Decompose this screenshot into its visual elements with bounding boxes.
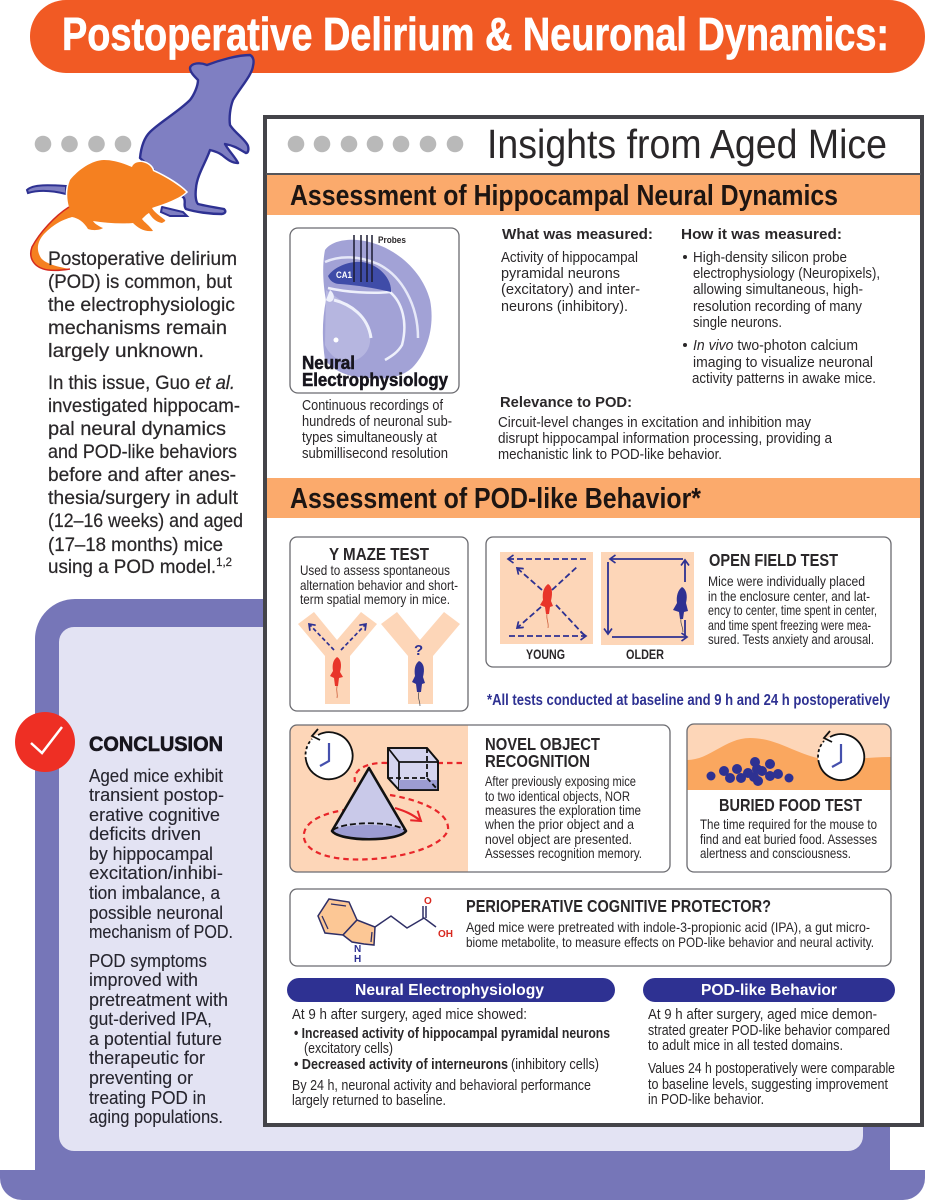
icon: orange mouse [31, 160, 186, 270]
conclusion text: pretreatment with [89, 989, 228, 1010]
card: novel object recognition [290, 725, 670, 872]
conclusion text: mechanism of POD. [89, 921, 233, 942]
title banner [30, 0, 925, 73]
card: neural electrophysiology: CA1 [336, 270, 352, 280]
card: novel object recognition: when the prior object and a [484, 817, 634, 832]
heading: POD-like behavior band: Assessment of POD-like Behavior* [290, 483, 702, 515]
conclusion text: treating POD in [89, 1087, 206, 1108]
card: Y maze test: Y MAZE TEST [329, 544, 429, 564]
card: novel object recognition: NOVEL OBJECT [485, 734, 600, 754]
card: buried food test: BURIED FOOD TEST [719, 795, 862, 815]
card: neural electrophysiology: Probes [378, 235, 406, 245]
intro text: Postoperative delirium [48, 248, 237, 270]
card: novel object recognition: After previously exposing mice [485, 774, 636, 789]
panel: POD-like behavior findings: to adult mice in all tested domains. [648, 1038, 843, 1054]
text: relevance to POD [498, 394, 832, 463]
icon: IPA molecule: N [354, 944, 361, 955]
text: what was measured: Activity of hippocampal [501, 250, 638, 266]
conclusion text: POD symptoms [89, 950, 207, 971]
card: open field test: sured. Tests anxiety and arousal. [708, 632, 874, 647]
card: novel object recognition: novel object are presented. [485, 832, 632, 847]
icon: IPA molecule: H [354, 954, 361, 965]
icon: IPA molecule: OH [438, 929, 453, 940]
intro text: 1,2 [216, 555, 232, 569]
conclusion text: Aged mice exhibit [89, 765, 224, 786]
icon: red arrow [395, 808, 421, 821]
card: perioperative cognitive protector: Aged mice were pretreated with indole-3-propionic acid (IPA), a gut micro- [466, 920, 870, 935]
card: open field test: OPEN FIELD TEST [709, 550, 838, 570]
card: neural electrophysiology: Neural [302, 353, 355, 373]
intro text: In this issue, Guo et al. [48, 372, 235, 394]
icon: food pellets [706, 757, 794, 786]
card: Y maze test: Used to assess spontaneous [300, 563, 450, 578]
card: buried food test [687, 724, 891, 872]
panel: POD-like behavior findings: POD-like Behavior [701, 982, 837, 999]
intro text: the electrophysiologic [48, 294, 235, 316]
text: how it was measured: activity patterns in awake mice. [692, 371, 876, 387]
intro text: (12–16 weeks) and aged [48, 510, 243, 532]
conclusion text: aging populations. [89, 1106, 223, 1127]
icon: IPA molecule [318, 896, 453, 965]
heading: POD-like behavior band [267, 478, 920, 518]
card: novel object recognition: RECOGNITION [485, 751, 590, 771]
conclusion text: possible neuronal [89, 902, 223, 923]
caption: recordings [302, 398, 452, 462]
panel: conclusion background [0, 599, 925, 1200]
text: how it was measured: How it was measured: [681, 226, 842, 243]
conclusion text: therapeutic for [89, 1047, 205, 1068]
card: perioperative cognitive protector [290, 889, 891, 966]
card: open field test: ency to center, time spent in center, [708, 603, 877, 618]
card: perioperative cognitive protector: PERIOPERATIVE COGNITIVE PROTECTOR? [466, 896, 771, 916]
conclusion text: a potential future [89, 1028, 222, 1049]
heading: hippocampal assessment band: Assessment of Hippocampal Neural Dynamics [290, 180, 838, 212]
card: Y maze test [290, 537, 468, 711]
subtitle: Insights from Aged Mice [487, 121, 887, 167]
text: relevance to POD: Circuit-level changes in excitation and inhibition may [498, 415, 812, 431]
intro text: thesia/surgery in adult [48, 487, 238, 509]
conclusion text: erative cognitive [89, 804, 220, 825]
panel: neural electrophysiology findings: (inhibitory cells) [511, 1057, 599, 1073]
intro text: (17–18 months) mice [48, 534, 223, 556]
panel: neural electrophysiology findings: By 24 h, neuronal activity and behavioral performance [292, 1078, 591, 1094]
icon: aged maze: ? [414, 642, 423, 659]
card: neural electrophysiology: Electrophysiology [302, 370, 448, 390]
card: open field test [486, 537, 891, 667]
text: what was measured: pyramidal neurons [501, 266, 620, 282]
text: how it was measured: allowing simultaneous, high- [693, 282, 863, 298]
text: how it was measured: High-density silicon probe [693, 250, 847, 266]
panel: POD-like behavior findings: strated greater POD-like behavior compared [648, 1023, 890, 1039]
icon: red dashed path [304, 763, 462, 860]
caption: recordings: Continuous recordings of [302, 398, 444, 414]
card: open field test: in the enclosure center, and lat- [708, 589, 870, 604]
panel: POD-like behavior findings: At 9 h after surgery, aged mice demon- [648, 1007, 877, 1023]
icon: older open field [601, 552, 694, 645]
text: how it was measured: resolution recording of many [693, 299, 863, 315]
card: open field test: and time spent freezing were mea- [708, 618, 871, 633]
panel: neural electrophysiology findings: Neural Electrophysiology [355, 982, 544, 999]
text: what was measured: neurons (inhibitory). [501, 299, 628, 315]
icon: aged maze [381, 612, 460, 706]
dots in frame [288, 136, 463, 152]
panel: main frame [265, 117, 922, 1125]
text: relevance to POD: mechanistic link to POD-like behavior. [498, 447, 722, 463]
icon: cube [388, 748, 438, 790]
panel: neural electrophysiology findings: largely returned to baseline. [292, 1093, 446, 1109]
card: neural electrophysiology [290, 228, 459, 393]
icon: IPA molecule: O [424, 896, 432, 907]
card: Y maze test: term spatial memory in mice. [300, 592, 450, 607]
panel: neural electrophysiology findings: (excitatory cells) [304, 1041, 393, 1057]
intro text [48, 248, 243, 578]
caption: recordings: types simultaneously at [302, 430, 437, 446]
card: novel object recognition: Assesses recognition memory. [485, 846, 642, 861]
intro text: pal neural dynamics [48, 418, 226, 440]
text: how it was measured: electrophysiology (Neuropixels), [693, 266, 880, 282]
panel: POD-like behavior findings: in POD-like behavior. [648, 1092, 764, 1108]
text: how it was measured [681, 226, 880, 387]
text: what was measured: (excitatory) and inter- [501, 282, 640, 298]
text: what was measured [501, 226, 653, 315]
card: open field test: YOUNG [526, 647, 565, 662]
dots left [35, 136, 131, 152]
text: what was measured: What was measured: [502, 226, 653, 243]
intro text: investigated hippocam- [48, 395, 240, 417]
intro text: mechanisms remain [48, 317, 227, 339]
card: buried food test: alertness and consciousness. [700, 846, 851, 861]
panel: neural electrophysiology findings: • Increased activity of hippocampal pyramidal neurons [294, 1026, 610, 1042]
panel: POD-like behavior findings: to baseline levels, suggesting improvement [648, 1077, 888, 1093]
conclusion text: gut-derived IPA, [89, 1008, 212, 1029]
intro text: before and after anes- [48, 464, 236, 486]
card: novel object recognition: measures the exploration time [485, 803, 641, 818]
caption: recordings: hundreds of neuronal sub- [302, 414, 452, 430]
text: how it was measured: single neurons. [693, 315, 782, 331]
panel: neural electrophysiology findings [287, 978, 615, 1109]
icon: cone [332, 768, 406, 839]
panel: neural electrophysiology findings: At 9 h after surgery, aged mice showed: [292, 1007, 527, 1023]
card: novel object recognition: to two identical objects, NOR [485, 789, 630, 804]
card: buried food test: find and eat buried food. Assesses [700, 832, 877, 847]
intro text: (POD) is common, but [48, 271, 232, 293]
conclusion text: excitation/inhibi- [89, 862, 223, 883]
conclusion text: deficits driven [89, 823, 201, 844]
conclusion text: improved with [89, 969, 198, 990]
conclusion heading: CONCLUSION [89, 732, 223, 756]
icon: clock [818, 731, 864, 780]
icon: standing purple mouse [27, 55, 254, 216]
text: relevance to POD: disrupt hippocampal information processing, providing a [498, 431, 832, 447]
intro text: largely unknown. [48, 340, 204, 362]
icon: young open field [500, 552, 593, 644]
caption: recordings: submillisecond resolution [302, 446, 448, 462]
conclusion text: by hippocampal [89, 843, 213, 864]
panel: neural electrophysiology findings: • Decreased activity of interneurons [294, 1057, 508, 1073]
icon: red check mark [15, 712, 75, 772]
intro text: and POD-like behaviors [48, 441, 237, 463]
intro text: using a POD model. [48, 556, 225, 578]
conclusion text [89, 765, 233, 1127]
conclusion text: tion imbalance, a [89, 882, 221, 903]
card: buried food test: The time required for the mouse to [700, 817, 877, 832]
conclusion text: preventing or [89, 1067, 193, 1088]
icon: clock [306, 729, 353, 779]
card: Y maze test: alternation behavior and short- [300, 578, 458, 593]
card: open field test: Mice were individually placed [708, 574, 865, 589]
text: how it was measured: In vivo two-photon calcium [693, 338, 858, 354]
text: how it was measured: imaging to visualize neuronal [693, 355, 873, 371]
icon: young maze [298, 612, 377, 704]
icon: brain section [323, 240, 432, 379]
card: open field test: OLDER [626, 647, 664, 662]
text: relevance to POD: Relevance to POD: [500, 394, 632, 411]
panel: POD-like behavior findings [643, 978, 895, 1108]
conclusion text: transient postop- [89, 784, 224, 805]
